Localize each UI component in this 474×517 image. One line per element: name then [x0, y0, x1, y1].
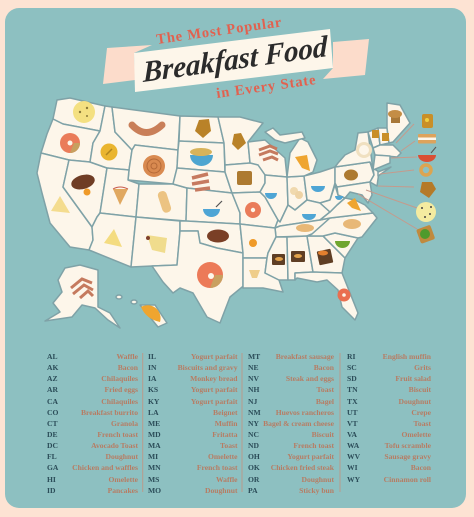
legend column 1: DC [47, 441, 58, 450]
legend column 2: Waffle [216, 475, 238, 484]
legend column 1: Omelette [108, 475, 139, 484]
legend column 4: UT [347, 408, 358, 417]
legend column 2: MO [148, 486, 161, 495]
icon: french toast MN [232, 133, 246, 150]
legend column 1: GA [47, 463, 59, 472]
icon: yogurt parfait IL [265, 193, 277, 199]
map of the United States [37, 98, 436, 328]
legend column 2: Yogurt parfait [191, 397, 238, 406]
legend column 4: Grits [414, 363, 431, 372]
legend column 2: KS [148, 385, 158, 394]
legend column 1: CT [47, 419, 58, 428]
icon: omelette VA [347, 198, 361, 211]
legend column 2: Muffin [215, 419, 238, 428]
legend column 2: LA [148, 408, 159, 417]
icon: sausage gravy WV [335, 196, 343, 200]
legend column 4: SD [347, 374, 357, 383]
icon: fried eggs AR [249, 239, 257, 247]
legend column 3: NH [248, 385, 259, 394]
legend column 4 [347, 352, 432, 484]
banner ribbon [103, 29, 369, 92]
legend column 1: FL [47, 452, 57, 461]
icon: sausage MT [132, 125, 162, 132]
legend table [47, 352, 432, 495]
icon: biscuits IN [290, 187, 303, 199]
title line: in Every State: in Every State [215, 72, 317, 102]
icon: chicken and waffles GA [317, 249, 333, 265]
legend column 3: Bagel & cream cheese [263, 419, 335, 428]
legend column 2: MN [148, 463, 161, 472]
icon: yogurt parfait KY [302, 214, 316, 220]
legend column 1: Granola [111, 419, 138, 428]
legend column 3: Sticky bun [299, 486, 335, 495]
legend column 4: English muffin [383, 352, 432, 361]
legend column 1: ID [47, 486, 56, 495]
legend column 3: NJ [248, 397, 257, 406]
icon: french toast ND [195, 119, 211, 138]
icon: toast MA [422, 114, 433, 128]
legend column 4: Tofu scramble [385, 441, 432, 450]
legend column 1: CO [47, 408, 58, 417]
icon: toast VT [372, 130, 379, 138]
legend column 1: Pancakes [108, 486, 138, 495]
icon: bacon NE [192, 174, 210, 190]
icon: muffin ME [388, 110, 402, 123]
legend column 3: OR [248, 475, 260, 484]
legend column 3: ND [248, 441, 259, 450]
legend column 1: AR [47, 385, 58, 394]
legend column 4: TX [347, 397, 358, 406]
icon: granola CT side [416, 202, 436, 222]
legend dividers [143, 353, 340, 492]
legend column 2: Omelette [208, 452, 238, 461]
legend column 3: MT [248, 352, 260, 361]
icon: cinnamon roll WY [143, 155, 165, 177]
legend column 2: Yogurt parfait [191, 352, 238, 361]
legend column 2: Toast [220, 441, 238, 450]
legend column 2: Yogurt parfait [191, 385, 238, 394]
legend column 2: Monkey bread [190, 374, 238, 383]
legend column 4: Biscuit [409, 385, 431, 394]
legend column 4: Doughnut [398, 397, 431, 406]
icon: omelette MI [295, 155, 310, 171]
legend column 2: ME [148, 419, 160, 428]
legend column 3: Chicken fried steak [271, 463, 335, 472]
icon: doughnut FL [338, 288, 350, 302]
legend column 1: Chilaquiles [101, 397, 138, 406]
legend column 2 [148, 352, 238, 495]
legend column 3: French toast [293, 441, 334, 450]
icon: bacon AK [71, 279, 93, 298]
icon: yogurt parfait KS [203, 201, 222, 217]
legend column 2: Fritatta [212, 430, 238, 439]
icon: monkey bread IA [237, 171, 252, 185]
icon: grits SC [335, 241, 350, 248]
legend column 3: Steak and eggs [286, 374, 334, 383]
icon: doughnut TX [197, 262, 223, 288]
legend column 2: MD [148, 430, 161, 439]
legend column 4: VA [347, 430, 358, 439]
legend column 1: Bacon [118, 363, 139, 372]
icon: chicken fried steak OK [207, 230, 229, 242]
legend column 4: WY [347, 475, 361, 484]
icon: french toast DE [420, 182, 436, 198]
icon: sticky bun PA [344, 170, 358, 180]
legend column 3: Bagel [316, 397, 334, 406]
icon: sandwich RI [418, 134, 436, 144]
legend column 1: DE [47, 430, 58, 439]
icon: bowl CT [418, 147, 436, 162]
legend column 3: PA [248, 486, 258, 495]
icon: waffle MS [272, 254, 285, 265]
legend column 2: MA [148, 441, 161, 450]
legend column 3 [248, 352, 335, 495]
icon: crepe UT [113, 187, 128, 205]
legend column 4: WV [347, 452, 361, 461]
legend column 4: WA [347, 441, 360, 450]
legend column 2: MS [148, 475, 159, 484]
legend column 3: NV [248, 374, 259, 383]
legend column 2: Biscuits and gravy [178, 363, 238, 372]
legend column 2: Beignet [213, 408, 238, 417]
icon: avocado toast DC [416, 225, 435, 244]
legend column 1: Waffle [116, 352, 139, 361]
title line: Breakfast Food: Breakfast Food [142, 29, 328, 89]
legend column 2: KY [148, 397, 160, 406]
legend column 3: Biscuit [312, 430, 334, 439]
legend column 3: NY [248, 419, 259, 428]
title [103, 15, 369, 102]
icon: bagel NJ [421, 165, 431, 175]
legend column 3: Toast [317, 385, 334, 394]
icon: steak NV [70, 172, 96, 196]
legend column 4: Crepe [411, 408, 432, 417]
legend column 3: NE [248, 363, 259, 372]
title line: The Most Popular: The Most Popular [155, 15, 283, 48]
legend column 3: Huevos rancheros [276, 408, 334, 417]
legend column 3: Yogurt parfait [287, 452, 334, 461]
icon: bagel NY [358, 144, 370, 156]
states [37, 98, 410, 328]
legend column 4: Bacon [411, 463, 432, 472]
legend column 1: HI [47, 475, 56, 484]
legend column 3: NM [248, 408, 261, 417]
legend column 2: IA [148, 374, 157, 383]
legend column 2: MI [148, 452, 158, 461]
icon: yogurt parfait OH [311, 186, 325, 192]
legend column 3: Bacon [314, 363, 335, 372]
legend column 1: Chilaquiles [101, 374, 138, 383]
legend column 3: Breakfast sausage [276, 352, 335, 361]
legend column 1 [47, 352, 139, 495]
icon: omelette HI [141, 305, 161, 322]
icon: toast NH [382, 133, 389, 141]
legend column 3: Doughnut [302, 475, 334, 484]
legend column 4: VT [347, 419, 358, 428]
legend column 1: Fried eggs [104, 385, 138, 394]
legend column 4: Omelette [401, 430, 432, 439]
icon: burrito CO [157, 190, 172, 214]
legend column 1: Breakfast burrito [81, 408, 138, 417]
legend column 3: OK [248, 463, 260, 472]
legend column 1: Avocado Toast [91, 441, 138, 450]
legend column 4: TN [347, 385, 358, 394]
food icons [51, 101, 436, 322]
legend column 1: French toast [97, 430, 138, 439]
legend column 4: Toast [414, 419, 431, 428]
icon: pancakes ID [100, 144, 118, 160]
legend column 3: OH [248, 452, 260, 461]
legend column 1: AL [47, 352, 58, 361]
icon: biscuit TN [296, 224, 314, 232]
legend column 1: Doughnut [106, 452, 138, 461]
callout lines [358, 124, 417, 229]
icon: huevos NM [146, 235, 167, 253]
legend column 4: Sausage gravy [384, 452, 431, 461]
icon: bacon WI [259, 146, 278, 160]
icon: doughnut MO [245, 202, 261, 218]
legend column 2: Doughnut [205, 486, 238, 495]
legend column 1: AZ [47, 374, 58, 383]
icon: beignet LA [249, 270, 260, 278]
legend column 3: NC [248, 430, 259, 439]
legend column 4: SC [347, 363, 357, 372]
legend column 1: Chicken and waffles [72, 463, 138, 472]
legend column 2: IN [148, 363, 157, 372]
legend column 2: French toast [197, 463, 238, 472]
legend column 4: Fruit salad [395, 374, 432, 383]
icon: waffle AL [291, 251, 305, 262]
icon: doughnut OR [60, 133, 80, 153]
legend column 1: AK [47, 363, 58, 372]
legend column 2: IL [148, 352, 156, 361]
icon: chilaquiles CA [51, 196, 70, 213]
legend column 4: RI [347, 352, 355, 361]
icon: chilaquiles AZ [104, 229, 122, 247]
legend column 4: WI [347, 463, 358, 472]
icon: fruit salad SD [190, 148, 213, 166]
legend column 4: Cinnamon roll [384, 475, 431, 484]
icon: biscuit NC [343, 219, 361, 229]
icon: omelette WA [73, 101, 95, 123]
legend column 1: CA [47, 397, 58, 406]
